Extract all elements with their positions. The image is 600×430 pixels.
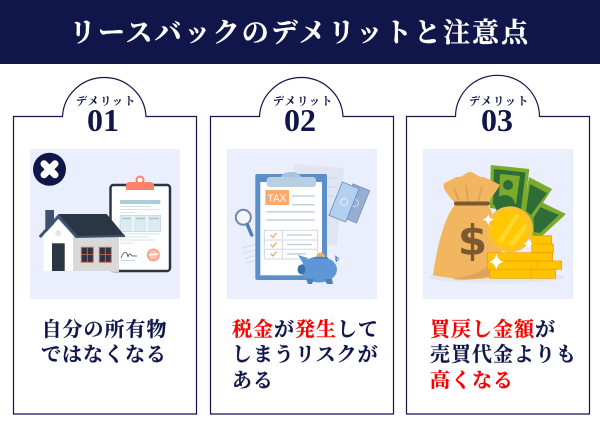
panel text 01: ではなくなる [41,343,167,366]
panel text 03 [430,317,577,392]
badge label 03: 03 [481,102,513,138]
illustration: tax form and piggy bank: TAX [268,194,287,204]
panel text 03: 買戻し金額が [430,317,556,341]
illustration: tax form and piggy bank [227,149,377,299]
title: リースバックのデメリットと注意点 [69,17,530,48]
badge label 03 [469,95,529,138]
badge label 02: デメリット [273,95,333,108]
panel text 02: 税金が発生して [232,318,379,341]
panel: demerit 03 [406,75,590,414]
panel: demerit 01 [14,78,196,414]
illustration: money bag and coins: $ [458,216,487,265]
illustration: house and contract [30,149,180,299]
panel: demerit 02 [210,78,394,414]
badge label 03: デメリット [469,95,529,108]
header banner [0,0,600,64]
card outline with arch tab [210,78,394,414]
badge label 01: デメリット [76,95,136,108]
panel text 02 [232,318,379,392]
badge label 01: 01 [87,102,119,138]
panel text 02: ある [232,370,274,392]
panel text 01: 自分の所有物 [42,318,168,341]
illustration: money bag and coins [423,149,573,299]
panel text 01 [41,318,168,366]
card outline with arch tab [406,75,590,414]
badge label 02 [273,95,333,138]
panel text 03: 高くなる [430,369,514,392]
badge label 02: 02 [284,102,316,138]
card outline with arch tab [14,78,196,414]
badge label 01 [76,95,136,138]
panel text 03: 売買代金よりも [430,342,577,366]
panel text 02: しまうリスクが [232,343,379,366]
